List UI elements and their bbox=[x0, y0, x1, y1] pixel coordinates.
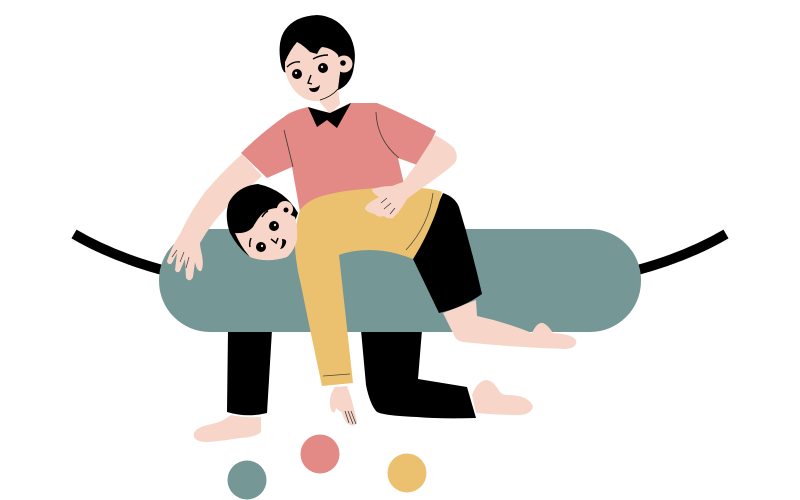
bolster bbox=[159, 229, 641, 332]
adult kneeling leg bbox=[361, 330, 533, 418]
finger lines bbox=[345, 411, 356, 424]
brows, nose and mouth bbox=[250, 211, 278, 247]
adult back leg bbox=[194, 330, 272, 442]
adult hand on child's back bbox=[365, 135, 457, 218]
child shorts bbox=[413, 193, 482, 313]
right hanging strap bbox=[630, 234, 726, 272]
hair bbox=[280, 15, 355, 90]
child dangling hand bbox=[330, 386, 357, 426]
child shirt bbox=[295, 187, 442, 386]
hair bbox=[227, 184, 298, 257]
ear bbox=[277, 201, 293, 217]
ear bbox=[336, 56, 352, 72]
adult neck bbox=[319, 88, 340, 114]
adult shirt bbox=[241, 103, 436, 212]
child head bbox=[227, 184, 298, 260]
shirt seams bbox=[323, 193, 433, 376]
left hanging strap bbox=[74, 234, 170, 272]
eyes bbox=[269, 221, 279, 231]
shirt sleeve seams bbox=[284, 112, 399, 167]
eyes bbox=[292, 69, 302, 79]
finger lines bbox=[172, 250, 189, 268]
ball: teal bbox=[228, 460, 266, 500]
ball: yellow bbox=[388, 454, 426, 492]
face bbox=[285, 42, 340, 101]
face bbox=[235, 208, 297, 260]
ball: pink bbox=[300, 434, 340, 474]
adult collar bbox=[308, 103, 351, 128]
child calf and foot bbox=[443, 300, 576, 349]
finger lines bbox=[381, 198, 395, 214]
adult arm and hand on bolster bbox=[167, 154, 262, 280]
brows, nose and mouth bbox=[287, 55, 328, 84]
adult head bbox=[280, 15, 355, 101]
